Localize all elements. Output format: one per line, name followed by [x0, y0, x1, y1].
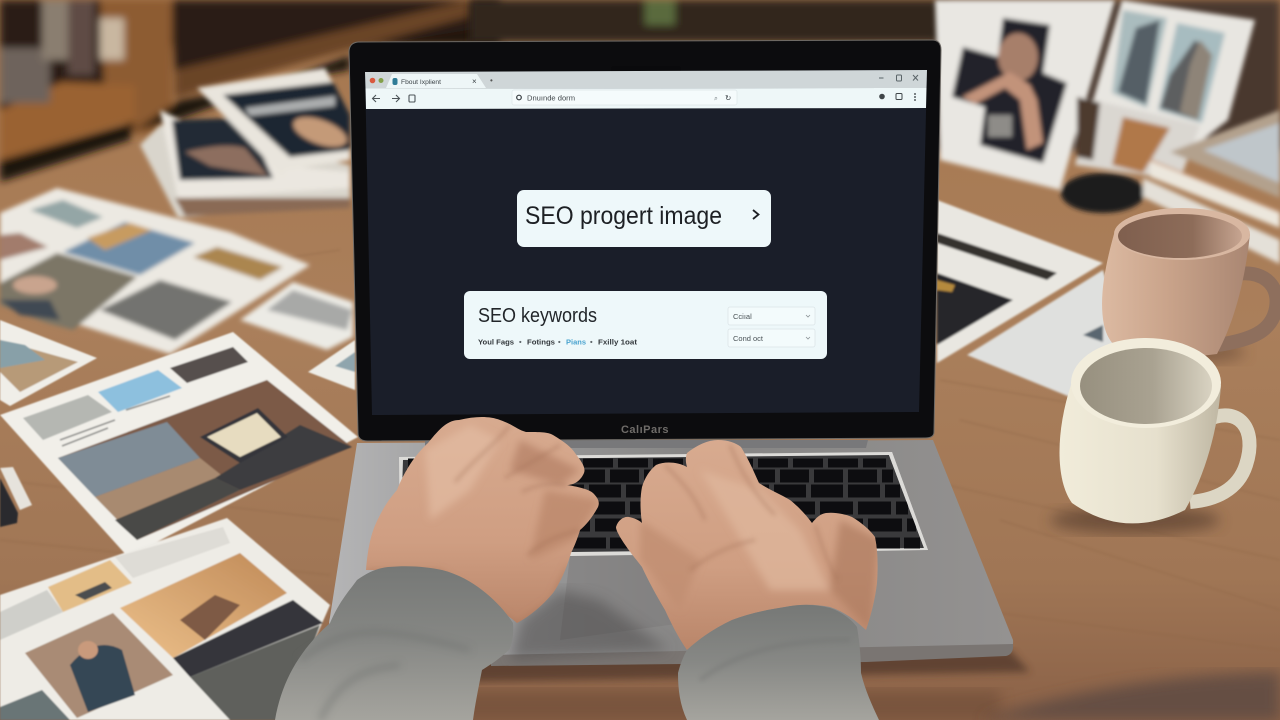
print image: blue scene: [63, 222, 195, 275]
magazine stack top left: [140, 68, 350, 218]
dropdown: bottom: [728, 329, 815, 347]
breadcrumb: •: [519, 338, 522, 346]
browser window chrome: •: [490, 76, 493, 85]
toolbar icons: [879, 93, 915, 101]
card: SEO project image: [517, 190, 771, 247]
address text: Dnuınde dorm: [527, 96, 575, 102]
left sleeve: [275, 566, 513, 720]
right hand: [610, 435, 885, 655]
print image: grey photo: [100, 280, 232, 340]
hand shadow on trackpad: [510, 590, 670, 660]
print group: white sheets: [0, 188, 310, 354]
print image: grey blue: [30, 200, 103, 228]
active tab: [386, 74, 486, 88]
breadcrumb: Fxilly 1oat: [598, 338, 638, 346]
breadcrumb: Fotings: [527, 338, 555, 346]
keyboard: [399, 452, 928, 560]
print image: orange photo: [193, 247, 283, 280]
right sleeve: [678, 605, 879, 720]
traffic lights: [370, 78, 375, 83]
blurred back wall behind frames: [470, 0, 1280, 150]
framed photos and books top right: [935, 0, 1280, 264]
card: SEO keywords: [464, 291, 827, 359]
tab favicon: [392, 78, 398, 85]
mug body: [1060, 385, 1221, 523]
phone and card: [0, 467, 32, 527]
frame: city prints: [1093, 0, 1255, 150]
address toolbar: [366, 88, 926, 109]
tab strip: [365, 70, 927, 88]
browser window chrome: ↻: [725, 94, 731, 102]
print: small corner: [0, 320, 97, 406]
laptop shadow: [400, 650, 1030, 682]
print: bottom left collage: [0, 518, 330, 720]
tab title: Fbout Ixplient: [401, 79, 441, 86]
magazine under mugs: [967, 270, 1140, 397]
print: right small: [240, 282, 353, 350]
print image: portrait: [0, 233, 48, 260]
card: SEO project image: SEO progert image: [525, 202, 722, 230]
breadcrumb: •: [558, 338, 561, 346]
breadcrumb: Pians: [566, 338, 586, 346]
window controls: [879, 75, 918, 81]
prints lower left: [0, 320, 358, 720]
stack of books: [1143, 110, 1280, 264]
scattered photo prints top left: [0, 188, 353, 354]
print image: group photo: [0, 253, 137, 330]
coffee mug: beige: [1102, 208, 1277, 364]
browser window chrome: ×: [472, 77, 477, 86]
frame: sunset print: [1075, 97, 1200, 180]
screen background: [365, 70, 927, 415]
laptop brand: CalıPars: [621, 424, 669, 436]
print: living room: [0, 332, 358, 557]
keywords heading: SEO keywords: [478, 305, 597, 327]
dropdown: top: [728, 307, 815, 325]
frame: portrait photo: [935, 0, 1115, 190]
address bar: [512, 90, 737, 105]
camera notch: [611, 66, 681, 74]
browser window chrome: ⌕: [714, 96, 718, 102]
coffee mug: white: [1050, 338, 1250, 534]
left hand: [366, 417, 599, 623]
browser window chrome: [365, 70, 927, 109]
blurred bookshelf: [0, 0, 500, 182]
laptop base: [329, 440, 1013, 666]
hands typing: [275, 410, 885, 720]
breadcrumb: Youl Fags: [478, 338, 514, 346]
dropdown: bottom: Cond oct: [733, 334, 764, 343]
magazine with dark image: [937, 200, 1103, 363]
navigation icons: [372, 95, 415, 102]
dropdown: top: Cciıal: [733, 312, 752, 321]
laptop: [329, 40, 1030, 682]
blurred foreground shadow: [980, 672, 1280, 720]
mug body: [1102, 234, 1250, 362]
black stand: [1061, 173, 1145, 213]
mug handle: [1218, 273, 1277, 345]
breadcrumb: [478, 338, 638, 346]
mug handle: [1190, 415, 1250, 502]
breadcrumb: •: [590, 338, 593, 346]
laptop lid: [349, 40, 941, 441]
print: small right edge: [308, 340, 355, 390]
magazines right of laptop: [937, 200, 1140, 397]
